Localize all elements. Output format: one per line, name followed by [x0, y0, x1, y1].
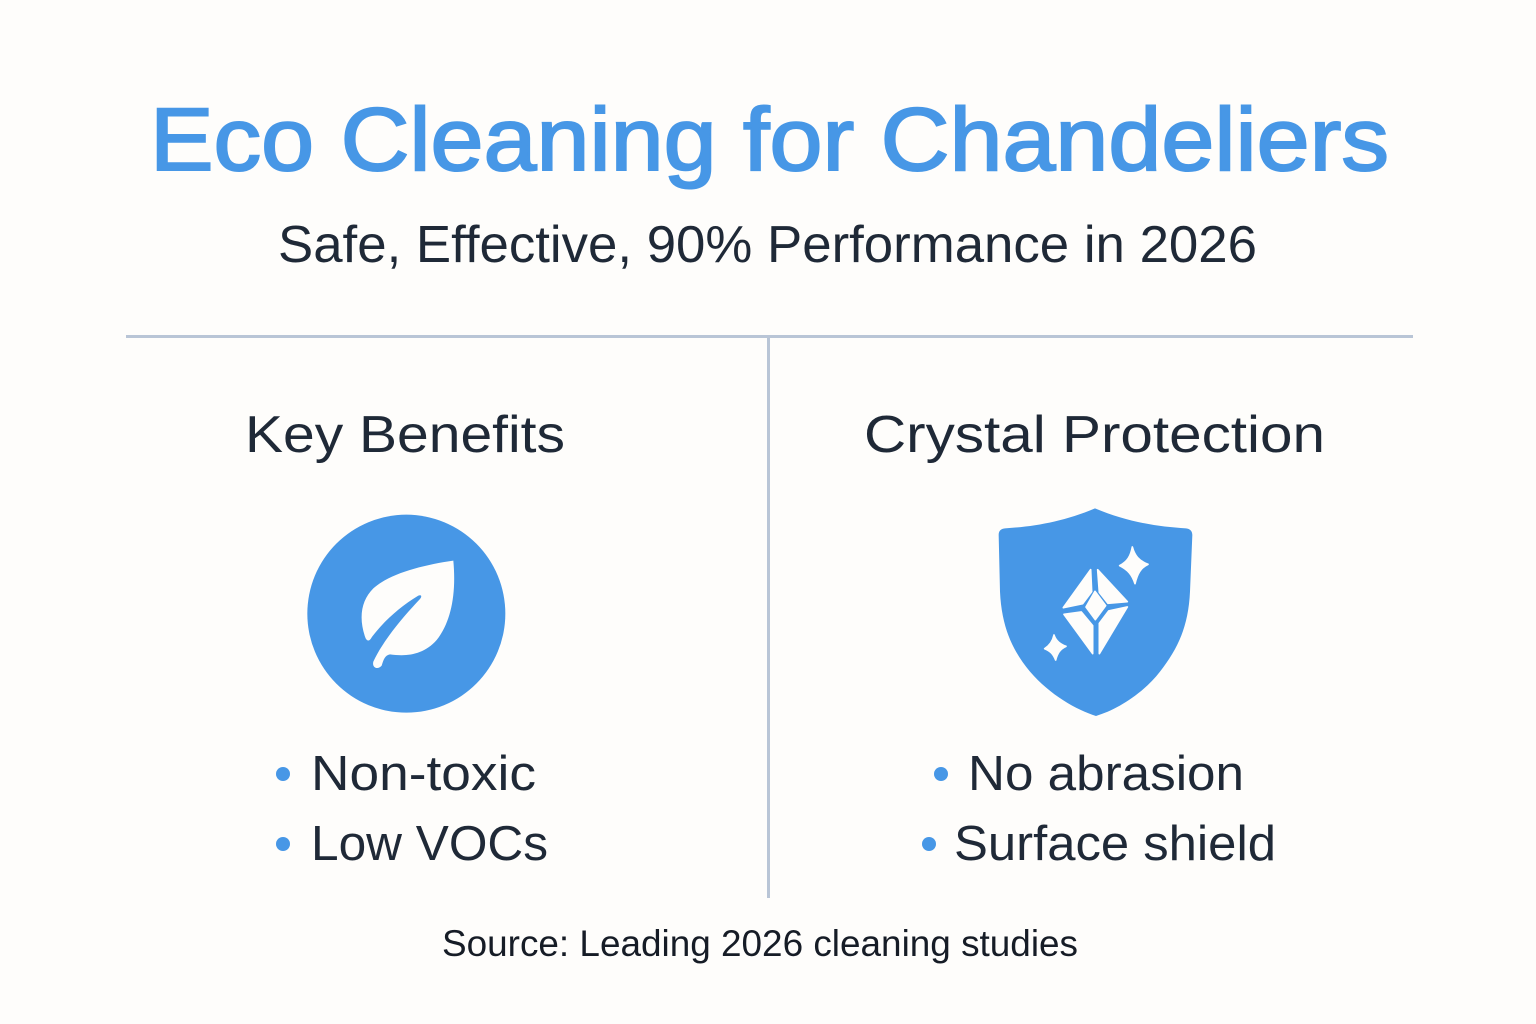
bullet list: protection: Surface shield [954, 817, 1276, 871]
bullet list: benefits: Low VOCs [311, 817, 548, 871]
bullet list: benefits: Non-toxic [311, 747, 536, 801]
title: Eco Cleaning for Chandeliers [150, 89, 1389, 189]
bullet list: benefits [276, 747, 548, 871]
heading: crystal protection: Crystal Protection [864, 406, 1325, 464]
panel: crystal protection [864, 406, 1325, 871]
icon: leaf in circle [307, 515, 505, 713]
bullet list: protection [922, 747, 1276, 871]
subtitle: Safe, Effective, 90% Performance in 2026 [278, 216, 1257, 274]
bullet list: protection: No abrasion [968, 747, 1244, 801]
heading: key benefits: Key Benefits [245, 406, 565, 464]
icon: shield with crystal [999, 508, 1192, 716]
source note: Source: Leading 2026 cleaning studies [442, 923, 1078, 964]
panel: key benefits [245, 406, 565, 871]
